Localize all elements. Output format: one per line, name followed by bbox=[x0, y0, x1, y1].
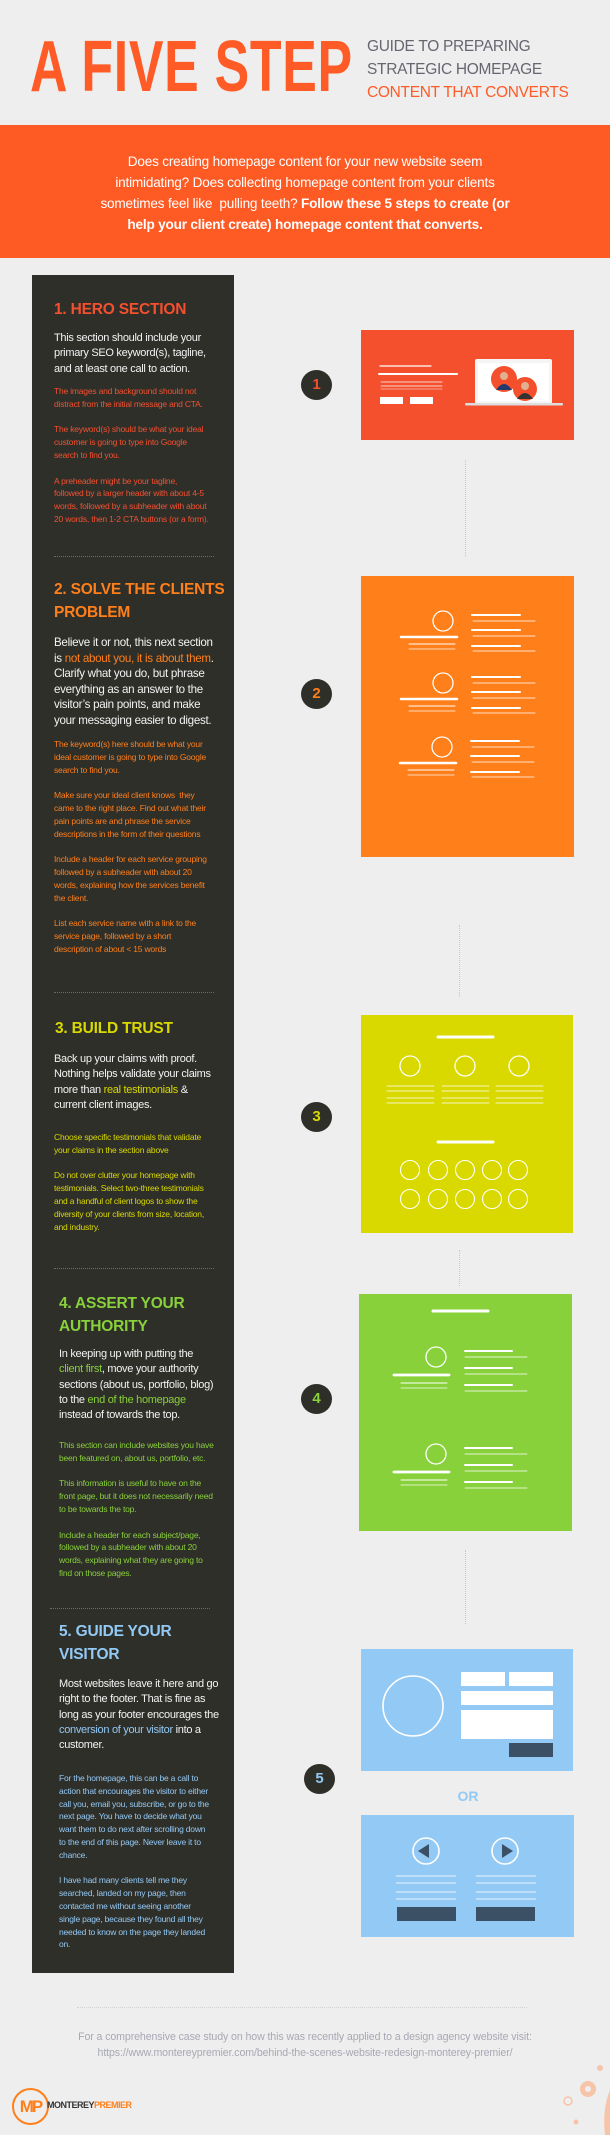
step 3 notes: diversity of your clients from size, location, bbox=[54, 1209, 204, 1219]
step 1 notes bbox=[54, 386, 209, 524]
step 2 notes: ideal customer is going to type into Google bbox=[54, 752, 206, 762]
step 2 body: is not about you, it is about them. bbox=[54, 652, 214, 665]
subtitle: CONTENT THAT CONVERTS bbox=[367, 84, 569, 101]
subtitle: GUIDE TO PREPARING bbox=[367, 38, 530, 55]
footer case study text: https://www.montereypremier.com/behind-the-scenes-website-redesign-monterey-premier/ bbox=[98, 2047, 512, 2059]
wireframe 5a: contact form bbox=[361, 1649, 573, 1771]
step 4 notes: words, explaining what they are going to bbox=[59, 1555, 203, 1565]
wireframe 2: services bbox=[361, 576, 574, 857]
step 2 heading: PROBLEM bbox=[54, 604, 130, 621]
logo: MONTEREYPREMIER bbox=[47, 2100, 132, 2110]
logo bbox=[12, 2088, 132, 2125]
step 3 body: Nothing helps validate your claims bbox=[54, 1068, 211, 1080]
step 3 notes: testimonials. Select two-three testimonials bbox=[54, 1183, 204, 1193]
intro banner: intimidating? Does collecting homepage content from your clients bbox=[115, 175, 495, 190]
step 4 body: to the end of the homepage bbox=[59, 1394, 186, 1406]
step 2 notes: search to find you. bbox=[54, 765, 120, 775]
step 2 notes: words, explaining how the services benefit bbox=[54, 880, 205, 890]
wireframe 3: testimonials bbox=[361, 1015, 573, 1233]
step 1 body bbox=[54, 332, 206, 375]
intro banner: help your client create) homepage content that converts. bbox=[127, 217, 483, 232]
wireframe 4: authority bbox=[359, 1294, 572, 1531]
step 1 notes: search to find you. bbox=[54, 450, 120, 460]
step 1 notes: followed by a larger header with about 4-5 bbox=[54, 488, 204, 498]
step 5 body: conversion of your visitor into a bbox=[59, 1724, 201, 1736]
step 3 body: current client images. bbox=[54, 1099, 152, 1111]
step 2 notes: The keyword(s) here should be what your bbox=[54, 739, 203, 749]
step 2 heading: 2. SOLVE THE CLIENTS bbox=[54, 581, 225, 598]
step 4 heading bbox=[59, 1295, 185, 1335]
step 4 body: client first, move your authority bbox=[59, 1363, 198, 1375]
wireframe 5b: next page navigation bbox=[361, 1815, 574, 1937]
heading: A FIVE STEP: A FIVE STEP bbox=[30, 27, 353, 107]
step 5 body bbox=[59, 1678, 219, 1751]
step 4 heading: AUTHORITY bbox=[59, 1318, 148, 1335]
intro banner: sometimes feel like pulling teeth? Follow these 5 steps to create (or bbox=[100, 196, 510, 211]
step 4 body: In keeping up with putting the bbox=[59, 1348, 193, 1360]
number badge 2 bbox=[301, 679, 332, 709]
subtitle bbox=[367, 38, 569, 101]
step 2 notes: followed by a subheader with about 20 bbox=[54, 867, 192, 877]
step 1 notes: words, followed by a subheader with about bbox=[54, 501, 206, 511]
step 5 notes bbox=[59, 1773, 209, 1949]
step 1 notes: 20 words, then 1-2 CTA buttons (or a form). bbox=[54, 514, 209, 524]
step 2 notes: pain points are and phrase the service bbox=[54, 816, 191, 826]
number badge 2: 2 bbox=[312, 685, 321, 702]
step 5 body: long as your footer encourages the bbox=[59, 1709, 219, 1721]
footer case study text bbox=[78, 2031, 532, 2059]
step 3 notes: your claims in the section above bbox=[54, 1145, 169, 1155]
step 3 body bbox=[54, 1053, 211, 1111]
step 2 body: everything as an answer to the bbox=[54, 683, 203, 696]
step 5 notes: want them to do next after scrolling down bbox=[59, 1824, 205, 1834]
number badge 1: 1 bbox=[312, 376, 321, 393]
number badge 4 bbox=[301, 1384, 332, 1414]
step 2 notes: the client. bbox=[54, 893, 88, 903]
step 1 body: primary SEO keyword(s), tagline, bbox=[54, 347, 206, 359]
step 3 notes: Do not over clutter your homepage with bbox=[54, 1170, 195, 1180]
panel: steps text column bbox=[32, 275, 234, 1973]
step 5 body: right to the footer. That is fine as bbox=[59, 1693, 205, 1705]
step 4 notes: to be towards the top. bbox=[59, 1504, 136, 1514]
step 1 notes: A preheader might be your tagline, bbox=[54, 476, 177, 486]
step 2 notes: List each service name with a link to the bbox=[54, 918, 196, 928]
step 1 body: and at least one call to action. bbox=[54, 363, 190, 375]
footer case study text: For a comprehensive case study on how this was recently applied to a design agency website visit: bbox=[78, 2031, 532, 2043]
number badge 3 bbox=[301, 1102, 332, 1132]
step 3 body: more than real testimonials & bbox=[54, 1084, 188, 1096]
step 5 notes: action that encourages the visitor to either bbox=[59, 1786, 208, 1796]
step 4 notes: This section can include websites you have bbox=[59, 1440, 214, 1450]
step 4 notes: front page, but it does not necessarily need bbox=[59, 1491, 213, 1501]
step 2 notes: came to the right place. Find out what their bbox=[54, 803, 206, 813]
step 1 notes: customer is going to type into Google bbox=[54, 437, 187, 447]
step 2 body: Believe it or not, this next section bbox=[54, 636, 213, 649]
step 1 body: This section should include your bbox=[54, 332, 201, 344]
number badge 1 bbox=[301, 370, 332, 400]
step 5 notes: searched, landed on my page, then bbox=[59, 1888, 186, 1898]
step 5 notes: contacted me without seeing another bbox=[59, 1901, 191, 1911]
step 4 body bbox=[59, 1348, 213, 1421]
step 4 notes: followed by a subheader with about 20 bbox=[59, 1542, 197, 1552]
OR label: OR bbox=[458, 1788, 478, 1804]
step 3 heading: 3. BUILD TRUST bbox=[55, 1020, 173, 1037]
decorative circles bbox=[564, 2065, 610, 2135]
subtitle: STRATEGIC HOMEPAGE bbox=[367, 61, 542, 78]
step 4 notes: This information is useful to have on the bbox=[59, 1478, 201, 1488]
step 3 notes: Choose specific testimonials that validate bbox=[54, 1132, 201, 1142]
step 4 notes: find on those pages. bbox=[59, 1568, 132, 1578]
step 2 notes bbox=[54, 739, 207, 954]
step 2 heading bbox=[54, 581, 225, 621]
number badge 3: 3 bbox=[312, 1108, 321, 1125]
step 2 notes: service page, followed by a short bbox=[54, 931, 171, 941]
wireframe 1: hero bbox=[361, 330, 574, 440]
title bbox=[30, 27, 569, 107]
intro banner bbox=[0, 125, 610, 258]
step 4 body: sections (about us, portfolio, blog) bbox=[59, 1379, 213, 1391]
step 5 notes: to the end of this page. Never leave it to bbox=[59, 1837, 201, 1847]
step 2 body: your messaging easier to digest. bbox=[54, 714, 211, 727]
step 5 notes: chance. bbox=[59, 1850, 87, 1860]
step 5 notes: needed to know on the page they landed bbox=[59, 1927, 205, 1937]
step 5 heading: 5. GUIDE YOUR bbox=[59, 1623, 172, 1640]
step 2 notes: Make sure your ideal client knows they bbox=[54, 790, 195, 800]
step 5 body: Most websites leave it here and go bbox=[59, 1678, 218, 1690]
step 2 notes: Include a header for each service grouping bbox=[54, 854, 207, 864]
step 4 body: instead of towards the top. bbox=[59, 1409, 180, 1421]
step 5 notes: call you, email you, subscribe, or go to the bbox=[59, 1799, 209, 1809]
step 5 notes: single page, because they found all they bbox=[59, 1914, 203, 1924]
step 1 notes: The images and background should not bbox=[54, 386, 196, 396]
number badge 5: 5 bbox=[315, 1770, 324, 1787]
intro banner: Does creating homepage content for your new website seem bbox=[128, 154, 482, 169]
logo: MP bbox=[20, 2097, 41, 2116]
step 2 body bbox=[54, 636, 214, 727]
step 2 notes: descriptions in the form of their questions bbox=[54, 829, 200, 839]
step 5 notes: on. bbox=[59, 1939, 70, 1949]
step 5 heading: VISITOR bbox=[59, 1646, 119, 1663]
step 5 body: customer. bbox=[59, 1739, 104, 1751]
step 3 body: Back up your claims with proof. bbox=[54, 1053, 197, 1065]
step 2 body: visitor’s pain points, and make bbox=[54, 698, 200, 711]
step 4 notes bbox=[59, 1440, 214, 1578]
step 1 notes: The keyword(s) should be what your ideal bbox=[54, 424, 203, 434]
step 5 notes: For the homepage, this can be a call to bbox=[59, 1773, 198, 1783]
step 3 notes bbox=[54, 1132, 204, 1232]
step 1 heading: 1. HERO SECTION bbox=[54, 301, 186, 318]
number badge 5 bbox=[304, 1764, 335, 1794]
step 3 notes: and industry. bbox=[54, 1222, 99, 1232]
step 4 notes: Include a header for each subject/page, bbox=[59, 1530, 201, 1540]
step 4 notes: been featured on, about us, portfolio, etc. bbox=[59, 1453, 205, 1463]
step 4 heading: 4. ASSERT YOUR bbox=[59, 1295, 185, 1312]
number badge 4: 4 bbox=[312, 1390, 321, 1407]
step 2 body: Clarify what you do, but phrase bbox=[54, 667, 205, 680]
step 1 notes: distract from the initial message and CTA. bbox=[54, 399, 203, 409]
step 5 heading bbox=[59, 1623, 172, 1663]
step 2 notes: description of about < 15 words bbox=[54, 944, 166, 954]
step 5 notes: I have had many clients tell me they bbox=[59, 1875, 187, 1885]
step 5 notes: next page. You have to decide what you bbox=[59, 1811, 202, 1821]
step 3 notes: and a handful of client logos to show the bbox=[54, 1196, 198, 1206]
